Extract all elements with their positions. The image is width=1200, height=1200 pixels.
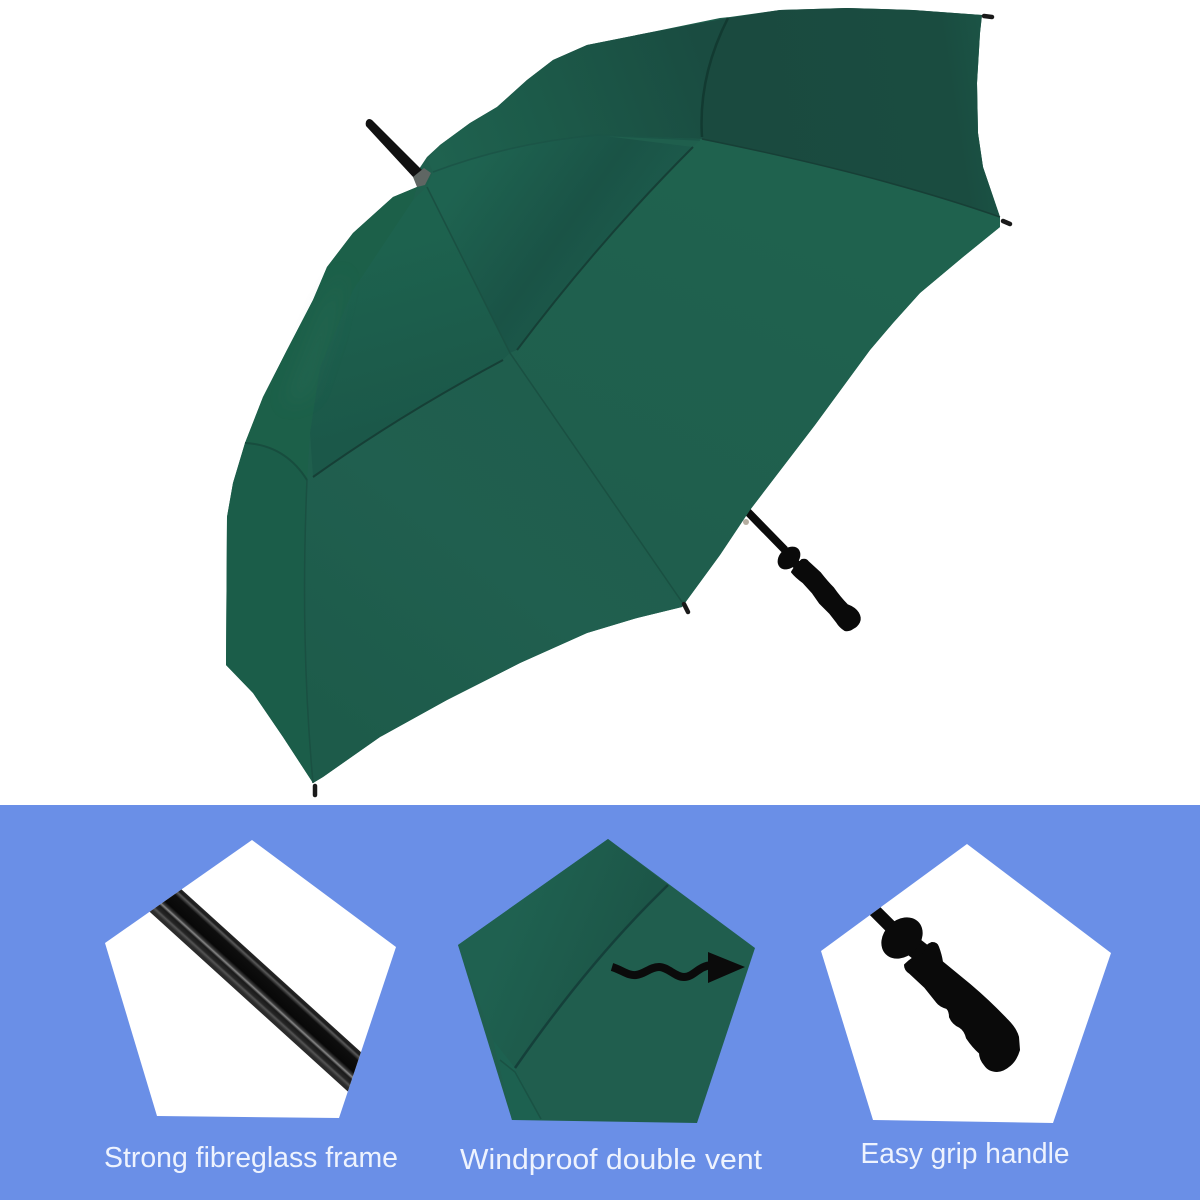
umbrella centre vent panel — [427, 135, 693, 353]
label: handle: Easy grip handle — [860, 1138, 1070, 1170]
vent seam — [515, 885, 668, 1068]
icon: wind arrow — [612, 952, 745, 983]
vent rib — [500, 1060, 541, 1119]
label: fibreglass: Strong fibreglass frame — [104, 1142, 398, 1174]
icon: handle — [868, 904, 1019, 1071]
umbrella lower left panel — [226, 443, 313, 783]
umbrella canopy — [226, 8, 1000, 783]
umbrella left outer panel — [245, 187, 417, 480]
vent lower left strip — [493, 1040, 542, 1120]
feature: fibreglass frame — [104, 840, 398, 1174]
label: vent: Windproof double vent — [460, 1144, 762, 1176]
blue feature band — [0, 805, 1200, 1200]
icon: fibreglass shaft — [150, 890, 361, 1092]
umbrella seams and ribs — [245, 18, 1000, 783]
umbrella lower main panel — [305, 353, 682, 783]
umbrella right main panel — [510, 139, 1000, 607]
umbrella upper strip panel — [428, 18, 728, 172]
umbrella — [226, 8, 1010, 795]
umbrella top ferrule — [366, 119, 431, 187]
umbrella left vent panel — [310, 187, 510, 477]
pentagon: handle close-up — [821, 844, 1111, 1123]
feature: grip handle — [821, 844, 1111, 1170]
pentagon: frame close-up — [105, 840, 396, 1118]
pentagon: vent close-up — [458, 839, 755, 1123]
vent dark upper panel — [458, 839, 668, 1068]
umbrella fabric highlight — [285, 270, 345, 405]
umbrella top right panel — [702, 8, 1000, 217]
umbrella rib tips — [315, 16, 1010, 795]
feature: double vent — [458, 839, 762, 1176]
umbrella handle — [743, 508, 860, 630]
